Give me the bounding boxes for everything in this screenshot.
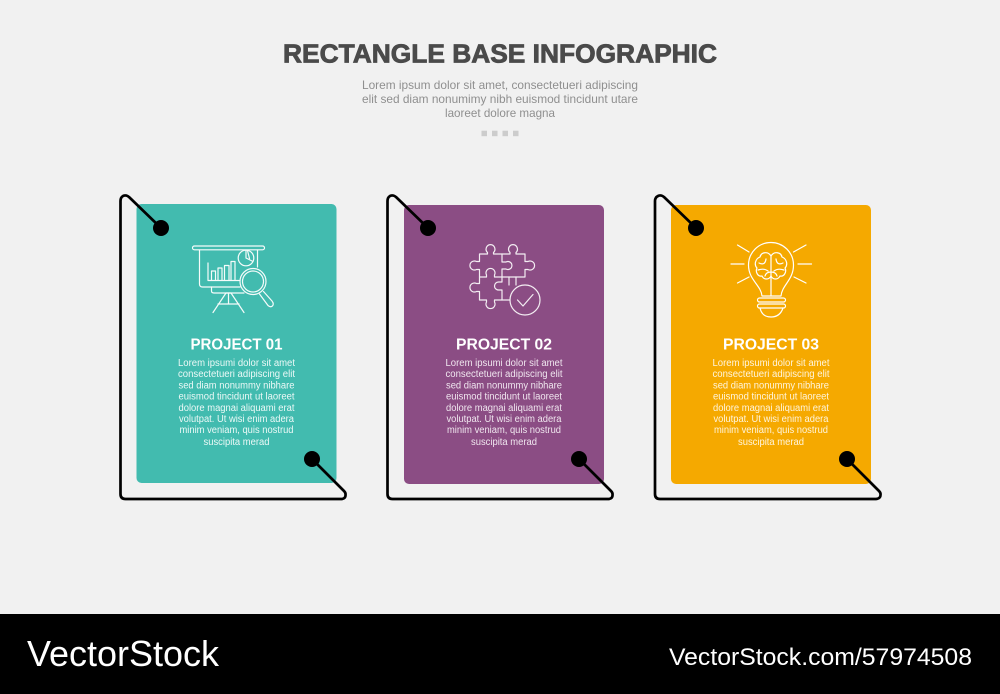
body text: dolore magnai aliquami erat xyxy=(178,403,295,414)
icon: puzzle with check mark xyxy=(470,245,540,315)
body text: consectetueri adipiscing elit xyxy=(446,369,563,380)
card background xyxy=(671,205,871,484)
title: RECTANGLE BASE INFOGRAPHIC xyxy=(283,40,717,68)
card background xyxy=(404,205,604,484)
card background xyxy=(136,204,336,483)
body text: Lorem ipsumi dolor sit amet xyxy=(712,358,830,369)
body text: minim veniam, quis nostrud xyxy=(180,425,294,436)
body text: Lorem ipsumi dolor sit amet xyxy=(178,358,295,369)
icon: light bulb with brain xyxy=(731,242,812,317)
frame line with dots xyxy=(120,195,346,499)
footer url: VectorStock.com/57974508 xyxy=(669,644,972,671)
icon: presentation board with magnifier xyxy=(192,246,273,312)
body text xyxy=(178,358,295,448)
heading: PROJECT 03 xyxy=(723,336,819,354)
panel: project 03 xyxy=(655,195,881,499)
body text: suscipita merad xyxy=(204,437,270,448)
body text: minim veniam, quis nostrud xyxy=(714,425,828,436)
frame line with dots xyxy=(655,195,881,499)
body text: suscipita merad xyxy=(738,437,804,448)
heading: PROJECT 01 xyxy=(190,336,283,354)
body text: dolore magnai aliquami erat xyxy=(446,403,562,414)
body text: consectetueri adipiscing elit xyxy=(178,369,295,380)
footer logo: VectorStock xyxy=(27,633,220,674)
footer bar xyxy=(0,614,1000,694)
body text: sed diam nonummy nibhare xyxy=(713,380,829,392)
body text: volutpat. Ut wisi enim adera xyxy=(179,414,294,425)
body text xyxy=(446,358,563,448)
subtitle: Lorem ipsum dolor sit amet, consectetueri adipiscing xyxy=(362,78,638,92)
body text: sed diam nonummy nibhare xyxy=(178,380,295,392)
body text: minim veniam, quis nostrud xyxy=(447,425,561,436)
body text: consectetueri adipiscing elit xyxy=(712,369,830,380)
body text: euismod tincidunt ut laoreet xyxy=(178,392,295,402)
body text: Lorem ipsumi dolor sit amet xyxy=(446,358,563,369)
subtitle: laoreet dolore magna xyxy=(445,106,555,120)
body text: sed diam nonummy nibhare xyxy=(446,380,562,392)
body text: euismod tincidunt ut laoreet xyxy=(446,392,562,402)
panel: project 02 xyxy=(388,195,613,499)
panel: project 01 xyxy=(120,195,346,499)
body text: volutpat. Ut wisi enim adera xyxy=(714,414,829,425)
body text: suscipita merad xyxy=(471,437,537,448)
heading: PROJECT 02 xyxy=(456,336,552,354)
subtitle: elit sed diam nonumimy nibh euismod tincidunt utare xyxy=(362,92,638,106)
body text: volutpat. Ut wisi enim adera xyxy=(446,414,562,425)
subtitle xyxy=(362,78,638,120)
frame line with dots xyxy=(388,195,613,499)
pagination dots xyxy=(482,131,518,136)
body text: euismod tincidunt ut laoreet xyxy=(713,392,829,402)
body text xyxy=(712,358,830,448)
body text: dolore magnai aliquami erat xyxy=(713,403,829,414)
